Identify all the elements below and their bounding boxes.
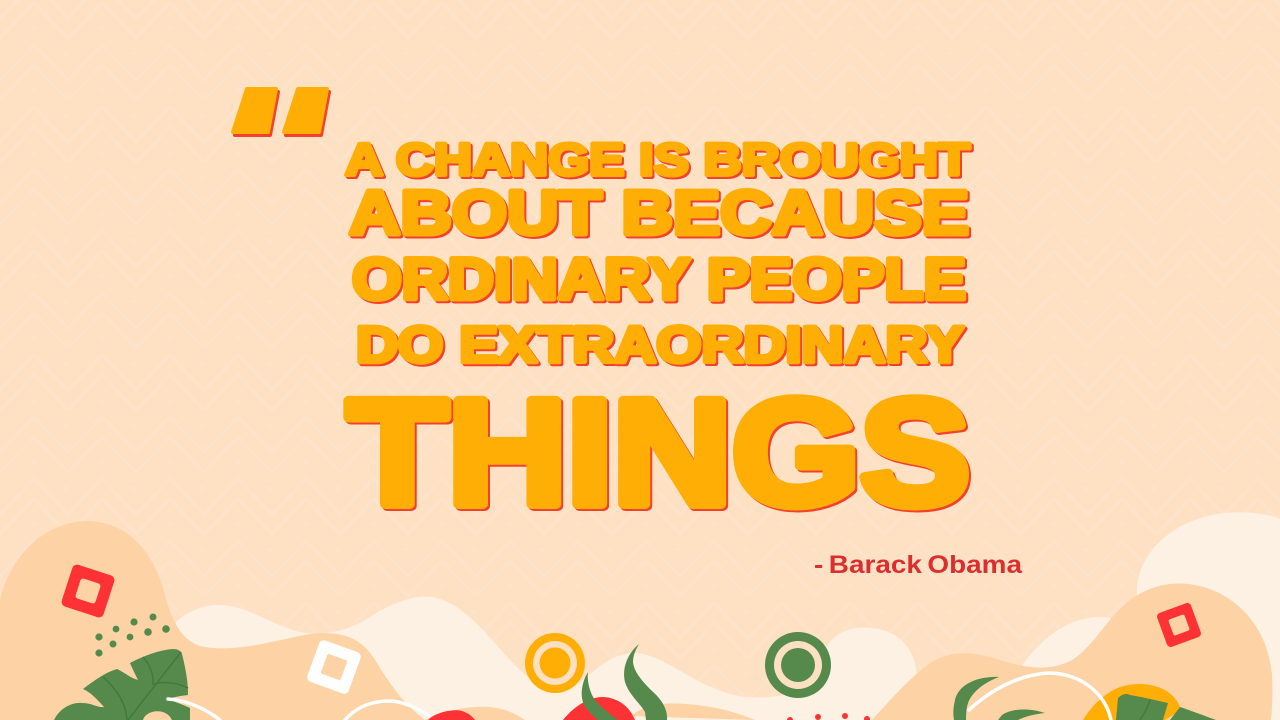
peach blob: right bbox=[872, 584, 1272, 720]
quote emphasis word: THINGS bbox=[349, 370, 972, 538]
green dots bbox=[95, 614, 170, 657]
quote line 3: ORDINARY PEOPLE bbox=[354, 249, 968, 314]
green stems bbox=[582, 644, 667, 720]
icon: green leaf right bbox=[1116, 694, 1216, 720]
quote line 3: ORDINARY PEOPLE bbox=[352, 247, 966, 312]
yellow blob right bbox=[1083, 684, 1181, 720]
red shape centre bbox=[563, 697, 635, 720]
quote line 1: A CHANGE IS BROUGHT bbox=[345, 134, 970, 185]
quote line 2: ABOUT BECAUSE bbox=[351, 181, 971, 250]
quotation mark bbox=[233, 89, 329, 135]
peach blob: left bbox=[0, 521, 425, 720]
icon: red square left bbox=[60, 563, 116, 619]
white curve left bbox=[168, 699, 220, 720]
icon: yellow target bbox=[525, 633, 585, 693]
quote line 4: DO EXTRAORDINARY bbox=[358, 318, 966, 375]
green leaf sprigs right bbox=[953, 677, 1045, 720]
quote line 4: DO EXTRAORDINARY bbox=[356, 316, 964, 373]
peach blob: bottom centre bbox=[630, 703, 755, 720]
icon: monstera leaf bbox=[54, 649, 190, 720]
attribution: - Barack Obama bbox=[814, 551, 1023, 579]
icon: red square right bbox=[1156, 602, 1202, 648]
red shape left bbox=[428, 710, 475, 720]
quote line 2: ABOUT BECAUSE bbox=[349, 179, 969, 248]
icon: green target bbox=[765, 632, 831, 698]
red dots bbox=[787, 713, 870, 720]
white curve right bbox=[968, 673, 1111, 720]
quote emphasis word: THINGS bbox=[347, 368, 970, 536]
peach blob: bottom left bbox=[425, 707, 525, 720]
icon: white square bbox=[306, 639, 362, 695]
cream wave layer bbox=[176, 512, 1280, 720]
white curve centre bbox=[345, 701, 430, 720]
quote line 1: A CHANGE IS BROUGHT bbox=[347, 136, 972, 187]
